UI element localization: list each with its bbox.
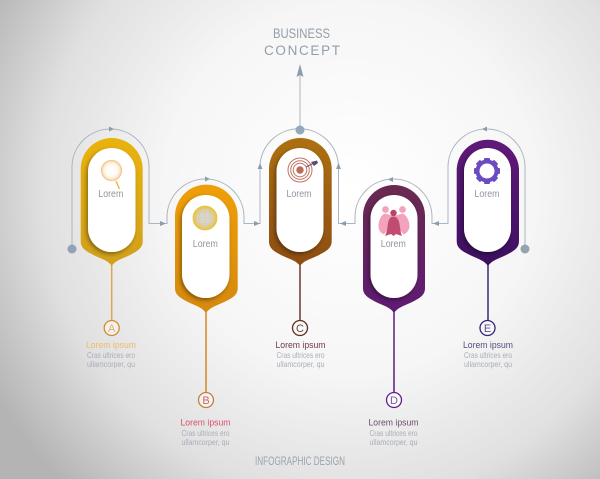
label C: C	[296, 323, 304, 335]
label B	[180, 392, 231, 447]
icon: target	[288, 158, 318, 182]
pin E	[457, 140, 519, 321]
pin E: Lorem	[474, 188, 500, 200]
icon: magnifier	[102, 160, 122, 189]
label D: ullamcorper, qu	[370, 438, 418, 447]
label D: Lorem ipsum	[368, 418, 419, 428]
icon: people	[378, 206, 410, 236]
label B: Cras ultrices ero	[182, 429, 230, 438]
label A: ullamcorper, qu	[87, 360, 135, 369]
start, center and end dots	[68, 126, 530, 254]
label E: Cras ultrices ero	[464, 351, 512, 360]
connector line with arrows	[72, 70, 525, 249]
pin D: Lorem	[381, 238, 406, 250]
title: CONCEPT	[264, 43, 340, 58]
title	[264, 26, 340, 58]
label D: Cras ultrices ero	[370, 429, 418, 438]
label E: Lorem ipsum	[463, 340, 513, 351]
pin D	[363, 185, 425, 393]
pin A	[81, 138, 143, 321]
label E: ullamcorper, qu	[464, 360, 512, 369]
label A: Cras ultrices ero	[87, 351, 135, 360]
label A: A	[108, 323, 116, 335]
label E	[463, 320, 513, 369]
label C: Cras ultrices ero	[276, 351, 325, 360]
label B: Lorem ipsum	[180, 418, 231, 428]
title: BUSINESS	[273, 26, 330, 41]
pin A: Lorem	[98, 188, 124, 200]
pin B: Lorem	[193, 238, 218, 250]
footer text: INFOGRAPHIC DESIGN	[255, 454, 345, 468]
label B: ullamcorper, qu	[182, 438, 230, 447]
label C: Lorem ipsum	[276, 340, 326, 351]
label D: D	[390, 395, 398, 407]
label C	[276, 320, 326, 369]
label B: B	[202, 395, 210, 407]
pin C: Lorem	[286, 188, 312, 200]
label E: E	[484, 323, 491, 335]
label C: ullamcorper, qu	[276, 360, 324, 369]
pin B	[175, 185, 238, 393]
label D	[368, 392, 419, 447]
pin C	[269, 138, 332, 321]
icon: gear	[474, 158, 500, 184]
arrowheads	[109, 64, 487, 226]
label A: Lorem ipsum	[86, 340, 136, 351]
label A	[86, 320, 136, 369]
icon: globe	[193, 206, 217, 230]
